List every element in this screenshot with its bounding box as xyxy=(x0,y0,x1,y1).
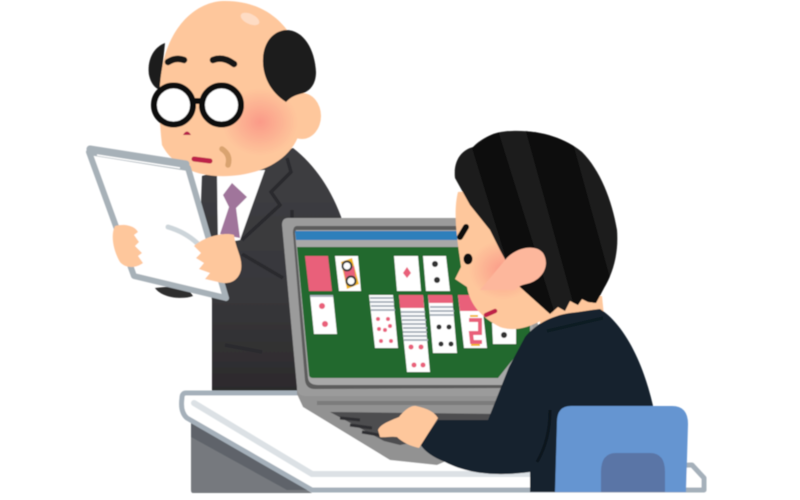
employee mouth xyxy=(486,311,495,315)
employee hand xyxy=(378,406,438,448)
employee xyxy=(378,128,655,492)
laptop xyxy=(282,218,540,465)
screen title bar xyxy=(295,231,484,240)
desk pedestal xyxy=(191,420,312,493)
employee face xyxy=(455,190,560,329)
employee hair xyxy=(455,128,617,330)
employee blush xyxy=(469,240,537,300)
boss suit xyxy=(200,148,345,392)
ace of diamonds xyxy=(394,256,421,291)
employee arm crease xyxy=(537,410,550,462)
employee hair back tuft xyxy=(518,280,558,314)
boss xyxy=(149,1,345,392)
boss mouth xyxy=(194,159,210,161)
boss right hand xyxy=(194,234,241,283)
chair xyxy=(555,406,688,492)
desk xyxy=(182,393,704,493)
boss head xyxy=(159,1,302,176)
employee collar line xyxy=(547,318,603,331)
boss eyebrows xyxy=(168,59,234,64)
tableau column 2 xyxy=(369,295,398,348)
chair inner panel xyxy=(601,453,665,492)
boss blush xyxy=(222,88,298,156)
tablet xyxy=(89,149,226,298)
boss shirt xyxy=(217,170,265,244)
employee eye xyxy=(464,254,472,264)
employee eyebrow xyxy=(460,227,466,237)
laptop keyboard xyxy=(330,412,500,445)
laptop screen frame xyxy=(282,218,540,396)
desk inner highlight xyxy=(194,403,530,474)
boss hair, left xyxy=(149,43,165,90)
queen card xyxy=(335,256,361,291)
employee torso xyxy=(420,309,655,492)
boss tie xyxy=(220,183,247,238)
boss sleeve xyxy=(155,285,193,298)
boss left hand xyxy=(113,225,143,267)
boss nose xyxy=(183,132,191,135)
employee neck xyxy=(540,296,604,330)
illustration: boss watching employee play solitaire xyxy=(86,0,707,494)
desk top xyxy=(182,393,704,490)
red card deck xyxy=(305,256,332,291)
tableau column 1 xyxy=(310,295,337,334)
boss ear xyxy=(283,93,321,139)
tableau column 6 xyxy=(492,323,516,344)
boss glasses xyxy=(154,86,241,124)
boss cheek crease xyxy=(222,149,229,165)
tableau column 5 xyxy=(458,295,487,348)
boss hair, right xyxy=(263,30,316,102)
tableau column 3 xyxy=(399,295,430,372)
employee ear xyxy=(480,248,546,290)
laptop deck xyxy=(297,385,540,465)
solitaire table xyxy=(297,247,530,378)
boss head highlight xyxy=(239,10,261,28)
tableau column 4 xyxy=(428,295,457,353)
two of clubs xyxy=(423,256,450,291)
